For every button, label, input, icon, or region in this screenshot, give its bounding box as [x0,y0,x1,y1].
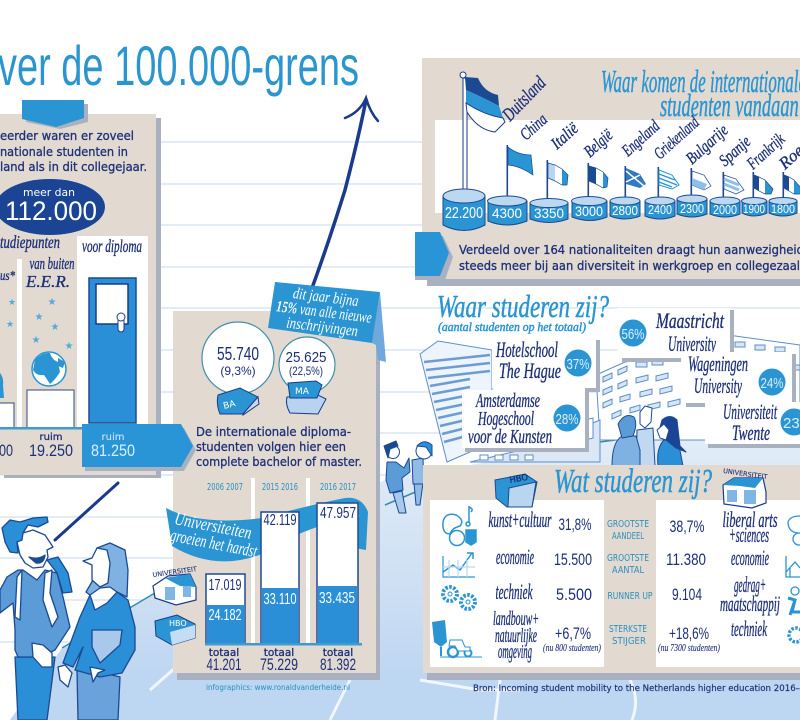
icon: door [89,278,136,423]
row: agriculture [432,608,601,663]
column: van buiten EER [25,254,74,428]
row: economy [443,544,592,577]
row: engineering: techniek [496,579,533,604]
oval: 112.000: meer dan [23,186,75,199]
row: art: kunst+cultuur [488,507,552,532]
bar chart: 47.957 [320,505,356,522]
panel: origin countries [415,58,800,286]
row: engineering [443,579,592,609]
totals: totaal [323,647,353,659]
middle labels: AANTAL [612,565,644,576]
card: Wageningen: 24% [760,375,784,392]
arrow: 81.250: ruim [102,432,124,443]
studiepunten column heading: tudiepunten [0,232,60,252]
icon: gears [443,587,475,609]
icon: line chart [443,553,475,577]
note: 7300: (nu 7300 studenten) [658,643,720,654]
flag: Duitsland [443,72,551,230]
icon: HBO small: HBO [169,619,187,628]
erasmus column: us* [0,269,15,284]
middle labels: STERKSTE [609,624,647,635]
row: economy: economie [496,544,534,569]
university values: 11.380 [666,550,706,569]
value: 19.250: 19.250 [29,441,73,460]
flag: Spanje [710,132,755,217]
floor [10,425,800,720]
right icons [786,516,800,642]
circle: MA: (22,5%) [289,364,323,378]
card: Hotelschool: 37% [566,356,590,373]
bar chart: 33.435 [319,590,355,607]
flag: Bulgarije: 2300 [680,202,704,216]
bar chart: 17.019 [208,577,242,594]
middle labels: GROOTSTE [607,553,649,564]
row: art [443,506,592,546]
year labels: 2006 2007 [207,482,243,493]
university values: 38,7% [670,517,704,536]
circle: BA: 55.740 [217,344,259,364]
card: Wageningen: University [694,373,742,398]
university subjects [720,507,780,641]
erasmus column [0,269,16,428]
flag: Roemenië: 1800 [771,202,795,216]
ribbon [166,498,368,561]
banner: 15% [268,282,386,362]
banner: 15%: inschrijvingen [285,315,359,340]
arrow: 81.250: 81.250 [91,441,135,460]
row: engineering: 5.500 [556,585,592,604]
flag: Frankrijk [742,129,789,216]
row: agriculture: (nu 800 studenten) [543,643,601,654]
icon: HBO [495,473,537,507]
card: Maastricht: 56% [622,326,644,343]
year labels: 2015 2016 [262,482,298,493]
arrow tab [415,232,453,280]
icon: BA book: BA [222,399,238,412]
panel: total students [0,100,161,478]
bar chart [205,503,362,646]
icon: universiteit [152,565,197,605]
text: diploma students: complete bachelor of master. [196,454,362,469]
subheading: (aantal studenten op het totaal) [438,320,586,334]
flag: Engeland: Engeland [617,116,664,160]
flag: Bulgarije [677,120,732,217]
illustration: group of students [612,406,686,466]
credit: infographics: www.ronaldvanderheide.nl [206,683,350,692]
row: agriculture: natuurlijke [495,625,537,647]
ribbon: groeien het hardst [169,525,260,561]
banner: 15%: dit jaar bijna [292,285,360,310]
flag: Griekenland: 2400 [648,203,672,217]
growth arrow [55,98,378,540]
icon: Universiteit [723,467,768,508]
value: 19.250 [29,432,73,460]
card: Hotelschool: Hotelschool [495,337,558,362]
card: Hotelschool: The Hague [499,358,561,383]
row: agriculture: landbouw+ [493,608,539,630]
column: van buiten EER: ★ [35,312,44,323]
oval: 112.000 [0,179,105,235]
icon: art [443,506,476,546]
card: Twente: Twente [732,420,770,445]
flag: Duitsland: Duitsland [498,73,551,126]
university values [666,517,709,643]
flag: China: China [516,110,551,144]
flag: België: 3000 [575,204,603,219]
flag: Italië [530,119,582,222]
flag: China: 4300 [492,205,522,221]
row: agriculture: omgeving [498,641,532,663]
column: van buiten EER: ★ [48,297,57,308]
flag: België: België [580,125,617,161]
intro text: land als in dit collegejaar. [0,160,147,174]
flag: Italië: Italië [546,119,582,154]
university values: +18,6% [669,624,709,643]
card: Maastricht: Maastricht [655,308,725,333]
flag: België [572,125,617,220]
illustration: male student [0,517,72,720]
column: voor diploma [77,236,148,428]
year labels [207,482,356,493]
column: voor diploma: voor diploma [82,236,142,256]
circle: BA: (9,3%) [220,364,256,378]
card: Maastricht [617,308,734,362]
card: Maastricht: University [668,331,716,356]
totals: 81.392 [320,655,356,674]
icon: globe [32,352,66,386]
icon: tree and tractor [432,620,482,657]
flag: Griekenland: Griekenland [650,113,703,163]
source: Bron: Incoming student mobility to the Netherlands higher education 2016– [473,684,800,694]
flag: Italië: 3350 [534,206,564,221]
ribbon: Universiteiten [173,508,253,543]
card: Amsterdamse: 28% [556,411,578,428]
heading: Waar studeren zij: Waar studeren zij? [437,288,609,324]
tab [22,100,88,129]
arrow: 81.250 [82,424,196,471]
column: van buiten EER: ★ [65,341,74,352]
totals: totaal [209,647,239,659]
circle: MA: 25.625 [286,349,326,366]
intro text: nationale studenten in [0,145,128,159]
row: art: 31,8% [558,516,592,534]
flag: Spanje: Spanje [715,132,755,170]
middle labels: GROOTSTE [607,519,649,530]
circle: BA [202,322,274,415]
middle labels: STIJGER [612,636,646,647]
text: diploma students: studenten volgen hier een [196,439,346,454]
card: Twente [705,399,800,448]
middle labels: AANDEEL [612,531,644,542]
card: Amsterdamse: Hogeschool [477,408,534,430]
banner: 15%: 15% van alle nieuwe [275,298,373,327]
illustration: female student [58,543,135,720]
column: van buiten EER: ★ [32,335,41,346]
flag: China [488,110,551,225]
middle labels [607,519,652,647]
flag: Roemenië [769,114,800,216]
card: Hotelschool [492,337,600,392]
bar chart: 42.119 [264,512,296,529]
icon: universiteit: UNIVERSITEIT [152,565,197,579]
row: agriculture: +6,7% [555,624,591,643]
totals: 41.201 [206,655,242,674]
card: Amsterdamse: Amsterdamse [475,390,540,412]
value: 19.250: ruim [40,432,62,443]
intro text: eerder waren er zoveel [0,129,134,143]
column: van buiten EER: E.E.R. [25,272,70,291]
flag: Griekenland [645,113,703,219]
heading: Wat studeren zij? [554,463,712,500]
totals: totaal [264,647,294,659]
illustration: small students [384,441,432,513]
cylinder: 22.200: 22.200 [445,205,483,222]
middle labels: RUNNER UP [608,591,652,602]
card: Amsterdamse [462,390,589,452]
column: van buiten EER: van buiten [30,254,74,273]
cylinder: 22.200 [443,189,485,230]
row: economy: 15.500 [554,550,592,569]
flag: Engeland: 2800 [612,203,638,218]
circle: MA [279,337,335,414]
flag: Engeland [610,116,664,219]
erasmus column: ★ [6,319,14,329]
flag: Bulgarije: Bulgarije [682,120,732,168]
card: Amsterdamse: voor de Kunsten [468,426,552,448]
totals [206,647,356,674]
icon: MA books: MA [295,387,310,397]
icon: Universiteit: UNIVERSITEIT [723,467,768,481]
bar chart: 33.110 [264,591,297,608]
oval: 112.000: 112.000 [5,196,97,226]
totals: 75.229 [260,655,298,674]
university values: 9.104 [672,585,702,604]
card: Wageningen [681,351,796,407]
flag: Frankrijk: 1900 [743,202,765,216]
icon: HBO small [155,615,195,645]
erasmus column: ★ [8,297,16,307]
illustration: buildings [420,335,800,462]
icon: HBO: HBO [509,473,529,486]
bar chart: 24.182 [208,607,242,624]
text: diploma students: De internationale diploma- [196,424,351,439]
panel: what they study [423,463,800,680]
title: ver de 100.000-grens [0,34,359,97]
panel: diploma students [166,282,386,680]
column: van buiten EER: ★ [51,322,60,333]
flag: Spanje: 2000 [713,203,737,217]
year labels: 2016 2017 [320,482,356,493]
card: Wageningen: Wageningen [688,351,748,376]
